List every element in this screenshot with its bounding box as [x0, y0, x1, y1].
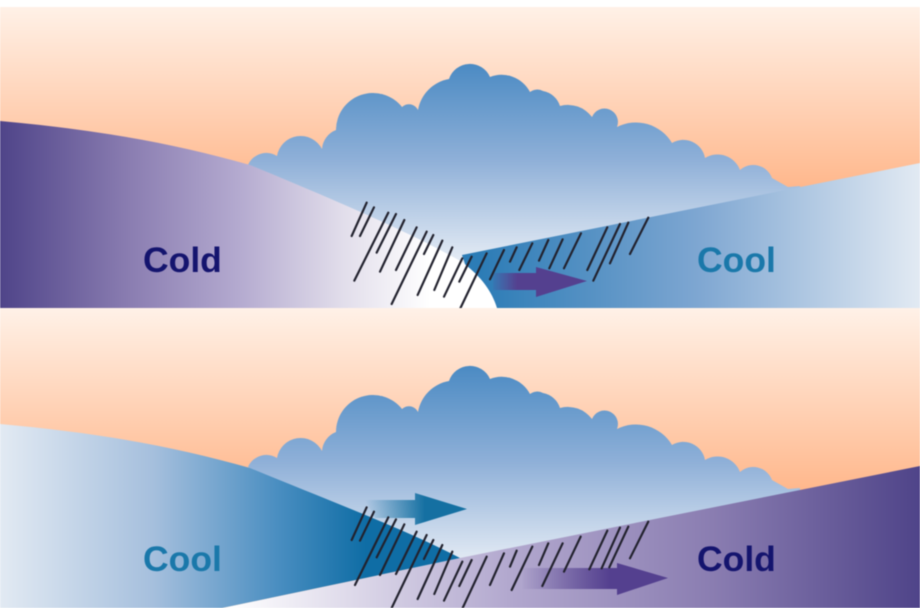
cloud	[248, 64, 800, 272]
cold air mass	[200, 465, 920, 608]
label: Cold: Cold	[143, 240, 222, 280]
cool air mass	[462, 162, 920, 308]
label: Cold: Cold	[697, 539, 776, 579]
arrow: cool air moving right	[365, 493, 467, 525]
cold air mass	[0, 121, 497, 308]
cloud	[248, 366, 800, 574]
label: Cool: Cool	[143, 539, 222, 579]
panel: bottom diagram, cold occlusion	[0, 308, 920, 608]
sky background	[0, 7, 920, 308]
rain	[352, 203, 648, 309]
cool air mass	[0, 424, 460, 608]
arrow: cool air moving right	[493, 267, 587, 297]
sky background	[0, 308, 920, 608]
label: Cool: Cool	[697, 240, 776, 280]
rain	[352, 507, 648, 608]
arrow: cold air moving right	[523, 563, 668, 595]
panel: top diagram, warm occlusion	[0, 7, 920, 309]
